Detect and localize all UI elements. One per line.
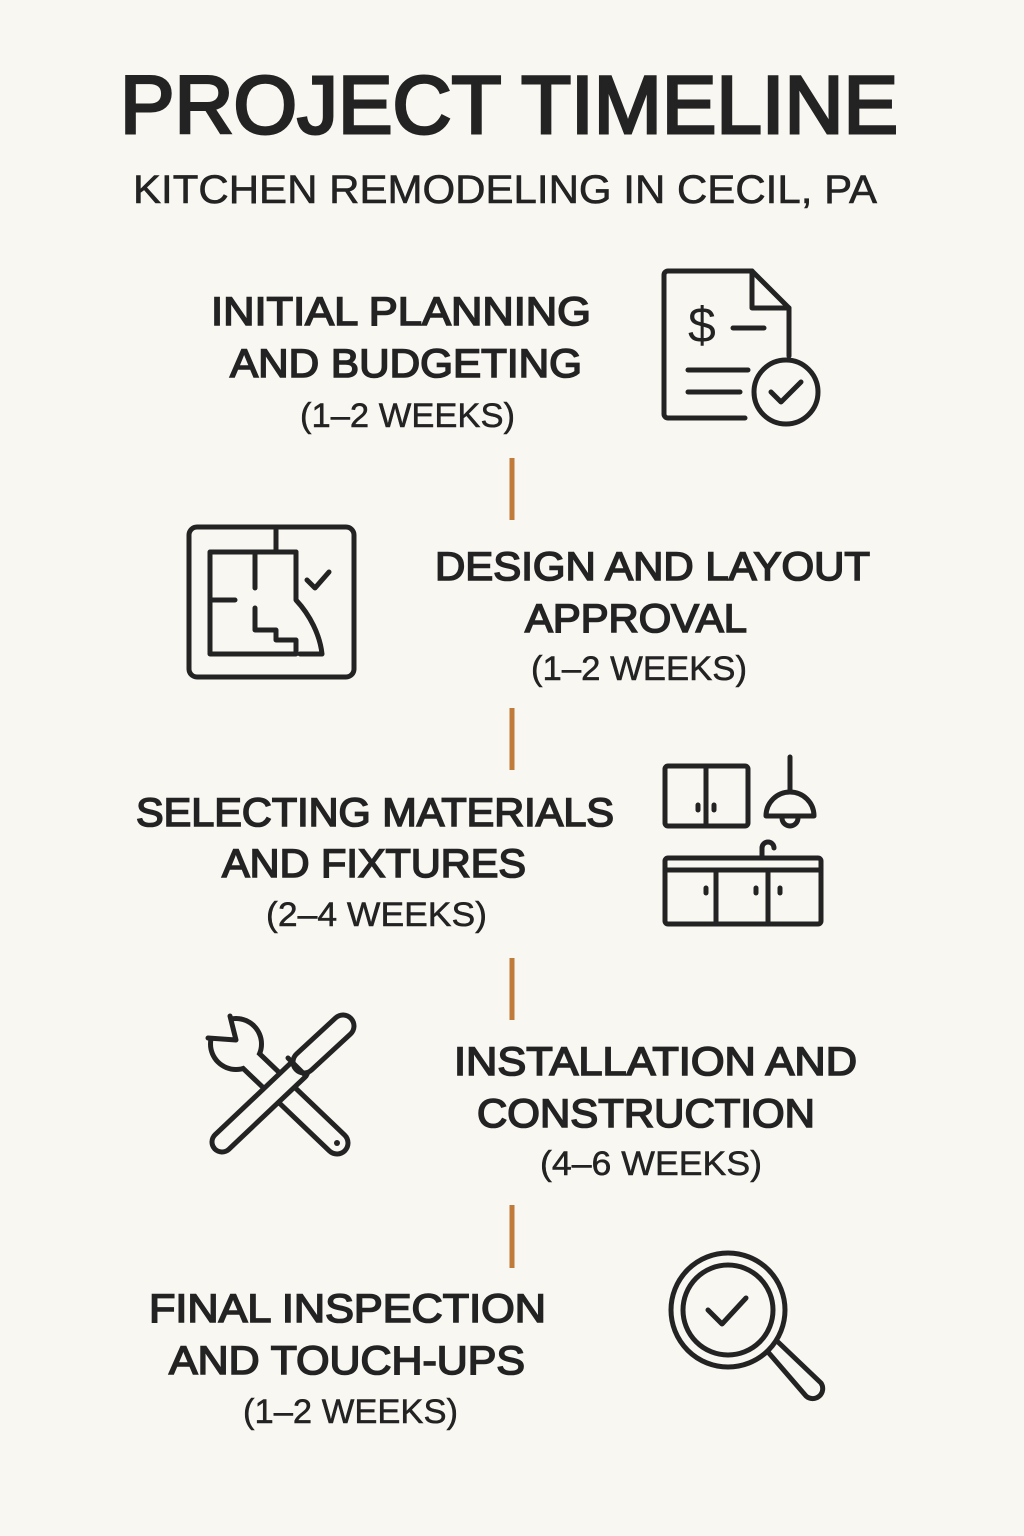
step 3 text [136, 791, 614, 934]
divider [510, 458, 514, 520]
step 2 text: APPROVAL [525, 597, 747, 641]
icon: magnifier with check [671, 1253, 823, 1399]
divider [510, 1205, 514, 1268]
step 4 text [454, 1040, 857, 1183]
divider [510, 958, 514, 1020]
title: PROJECT TIMELINE [120, 60, 898, 151]
icon: floor plan [189, 527, 354, 677]
icon: budget document [664, 271, 818, 424]
step 1 text: (1–2 WEEKS) [300, 397, 515, 435]
step 4 text: (4–6 WEEKS) [540, 1145, 762, 1183]
step 3 text: (2–4 WEEKS) [266, 896, 487, 934]
step 1 text: AND BUDGETING [230, 342, 582, 386]
subtitle: KITCHEN REMODELING IN CECIL, PA [133, 168, 877, 212]
icon: wrench and screwdriver [206, 1016, 343, 1146]
step 2 text: (1–2 WEEKS) [531, 650, 747, 688]
step 5 text [149, 1287, 546, 1431]
step 3 text: AND FIXTURES [222, 842, 526, 886]
step 5 text: (1–2 WEEKS) [243, 1393, 458, 1431]
step 4 text: INSTALLATION AND [454, 1040, 857, 1084]
step 5 text: FINAL INSPECTION [149, 1287, 546, 1331]
step 4 text: CONSTRUCTION [477, 1092, 815, 1136]
step 1 text: INITIAL PLANNING [211, 290, 591, 334]
step 5 text: AND TOUCH-UPS [169, 1339, 525, 1383]
icon: cabinets and lamp [665, 757, 821, 924]
step 2 text [435, 545, 870, 688]
icon: budget document: $ [688, 297, 716, 353]
divider [510, 708, 514, 770]
step 1 text [211, 290, 591, 435]
step 3 text: SELECTING MATERIALS [136, 791, 614, 835]
step 2 text: DESIGN AND LAYOUT [435, 545, 870, 589]
